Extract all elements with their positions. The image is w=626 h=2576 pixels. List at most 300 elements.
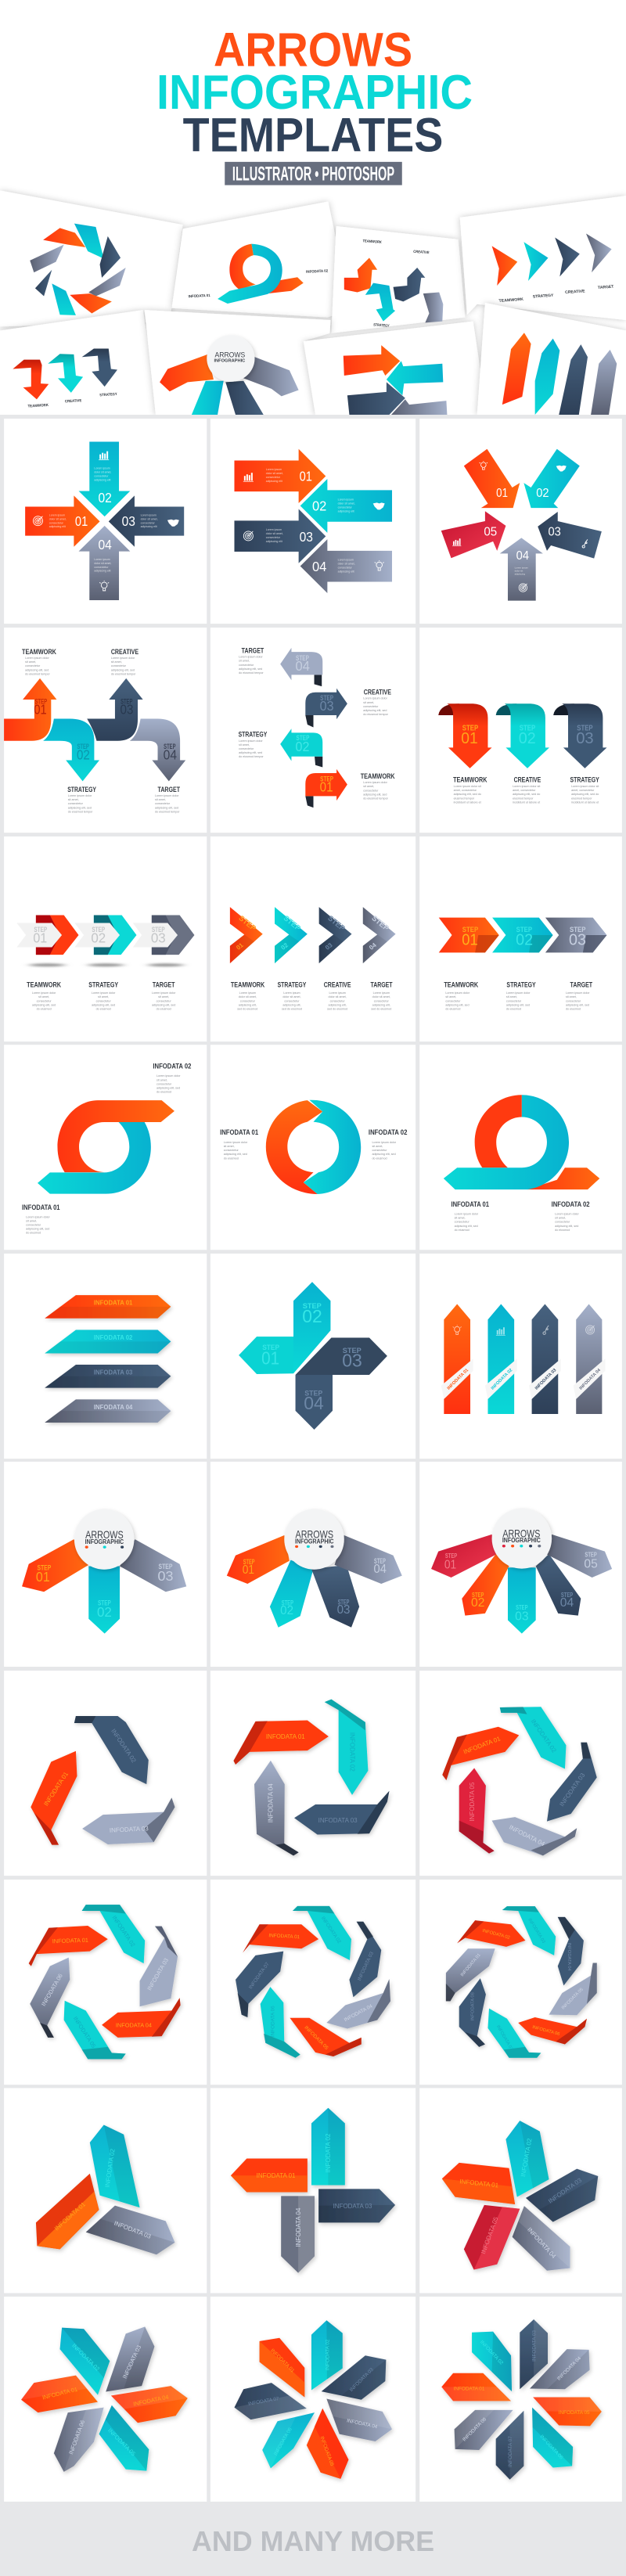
text: target: sit amet,	[239, 660, 250, 663]
ribbon 02	[457, 1920, 525, 1947]
ribbon 03	[502, 1906, 556, 1955]
mockup sheet: ribbon arrows: TEAMWORK	[27, 404, 49, 408]
arrow 04: adipiscing elit	[338, 570, 354, 573]
ribbon 02: 02	[296, 739, 309, 754]
ribbon 03	[305, 689, 347, 728]
text: teamwork: sit amet,	[445, 995, 456, 998]
arrow 04: INFODATA 04	[132, 2393, 169, 2408]
ribbon 06	[261, 1987, 300, 2058]
text: strategy: consectetur	[68, 802, 84, 805]
panel: five petals with circle	[419, 1462, 622, 1667]
text: strategy: Lorem ipsum dolor	[68, 794, 92, 797]
ribbon 01: INFODATA 01	[460, 1953, 482, 1977]
text: infodata 02	[552, 1201, 590, 1232]
petal 05: STEP	[585, 1552, 597, 1559]
mockup sheet: teal and orange ring: INFODATA 01	[188, 294, 210, 299]
arrow 04 down: 04	[164, 747, 177, 762]
chevron 01: 01	[235, 941, 245, 952]
text: infodata 01: adipiscing elit, sed	[455, 1225, 478, 1228]
panel: folded cross	[210, 1254, 416, 1459]
petal 01: 01	[36, 1569, 50, 1585]
arrow 01 up	[4, 678, 56, 741]
arrow 06: INFODATA 06	[273, 2427, 293, 2456]
bar 02	[45, 1330, 171, 1353]
mockup sheet: ring of ribbons	[0, 190, 183, 326]
text: strategy: consectetur	[284, 999, 300, 1002]
text: infodata 01	[22, 1204, 60, 1235]
arrow 04 up: 04	[99, 537, 112, 552]
icon: handshake	[373, 502, 385, 509]
text: strategy: adipiscing elit, sed	[92, 1003, 115, 1006]
text: creative: adipiscing elit, sed	[363, 709, 387, 712]
icon: light bulb	[480, 461, 487, 470]
arrow 02: 02	[302, 1307, 322, 1326]
icon: light bulb	[375, 560, 384, 570]
text: creative: sed do eiusmod	[327, 1007, 347, 1010]
arrow 02	[311, 2320, 343, 2390]
petal 04: STEP	[374, 1558, 386, 1565]
text: infodata 02: do eiusmod	[156, 1091, 171, 1094]
panel: vertical bars with labels	[419, 1254, 622, 1459]
ribbon 03: INFODATA 03	[527, 1918, 545, 1945]
text: creative: sit amet,	[111, 660, 122, 664]
ribbon 02: INFODATA 02	[110, 1914, 137, 1948]
text: strategy: STRATEGY	[239, 731, 268, 739]
circle badge: INFOGRAPHIC	[502, 1538, 541, 1545]
arrow 01: STEP	[262, 1343, 279, 1351]
text: teamwork: TEAMWORK	[361, 773, 395, 780]
petal 03: STEP	[159, 1563, 173, 1570]
bar 03: INFODATA 03	[534, 1368, 557, 1391]
text: target: TARGET	[158, 786, 180, 793]
text: infodata 02: do eiusmod	[372, 1157, 387, 1160]
bar 01	[45, 1295, 171, 1319]
text: teamwork	[22, 649, 56, 675]
text: infodata 02: sit amet,	[156, 1078, 167, 1081]
ribbon 05: INFODATA 05	[303, 2025, 329, 2051]
arrow 01	[239, 1337, 293, 1374]
arrow 02 down: consectetur	[94, 474, 109, 477]
arrow 03	[553, 703, 607, 768]
text: strategy: dolor sit amet,	[282, 995, 301, 998]
text: creative: Lorem ipsum dolor	[363, 697, 388, 700]
text: teamwork: Lorem ipsum dolor sit	[454, 785, 481, 788]
footer: and many more: AND MANY MORE	[192, 2525, 434, 2557]
panel: six faceted arrows	[4, 2297, 207, 2502]
text: target	[239, 647, 264, 675]
text: infodata 02: INFODATA 02	[369, 1129, 407, 1137]
arrow 07: INFODATA 07	[508, 2436, 513, 2467]
ribbon 01	[442, 1727, 519, 1780]
text: infodata 01: INFODATA 01	[220, 1129, 258, 1137]
arrow 04: dolor sit amet,	[338, 562, 355, 565]
arrow 06	[54, 2408, 104, 2472]
arrow 04 up	[79, 526, 130, 600]
arrow 04	[500, 538, 543, 601]
text: strategy: Lorem ipsum	[283, 991, 300, 995]
text: strategy: Lorem ipsum dolor sit	[571, 785, 599, 788]
text: target: consectetur	[155, 802, 171, 805]
text: teamwork	[27, 981, 62, 1010]
text: teamwork: do eiusmod	[445, 1007, 460, 1010]
petal 01: STEP	[37, 1565, 52, 1572]
arrow 01	[234, 449, 326, 503]
arrow 02	[505, 2121, 549, 2197]
text: strategy: sit amet,	[98, 995, 109, 998]
text: strategy: Lorem ipsum dolor	[506, 991, 531, 995]
text: creative: dolor sit amet,	[329, 995, 347, 998]
text: creative: do eiusmod tempor	[111, 672, 136, 675]
text: teamwork: Lorem ipsum dolor	[363, 781, 388, 784]
petal 05: 05	[584, 1557, 598, 1570]
circle badge	[284, 1509, 344, 1570]
text: teamwork: incididunt ut labore et	[454, 801, 481, 804]
circle badge: ARROWS	[296, 1528, 333, 1541]
arrow 03: 03	[576, 729, 594, 747]
ribbon 04	[102, 1998, 181, 2038]
text: target	[152, 981, 176, 1010]
text: infodata 02: Lorem ipsum dolor	[156, 1074, 181, 1078]
mockup sheet: chevrons: CREATIVE	[565, 289, 586, 295]
ribbon 02: INFODATA 02	[482, 1929, 510, 1941]
text: strategy: Lorem ipsum dolor	[92, 991, 116, 995]
ribbon 06: INFODATA 06	[271, 2006, 276, 2037]
arrow 04	[513, 2206, 570, 2271]
arrow 03: Lorem ipsum	[266, 528, 282, 531]
petal 02: 02	[280, 1603, 293, 1617]
text: target: do eiusmod	[156, 1007, 171, 1010]
arrow 03	[106, 2326, 154, 2392]
panel: four petals with circle	[210, 1462, 416, 1667]
petal 04	[536, 1554, 581, 1616]
arrow 04: 04	[516, 549, 529, 563]
petal 03	[311, 1565, 359, 1628]
text: creative: Lorem ipsum dolor	[111, 657, 135, 660]
text: target: adipiscing elit,	[372, 1003, 390, 1006]
arrow 05: INFODATA 05	[319, 2436, 335, 2467]
text: teamwork: adipiscing elit, sed	[32, 1003, 56, 1006]
arrow 02: 02	[312, 498, 326, 514]
panel: four ribbons ring	[210, 1671, 416, 1876]
text: target: Lorem ipsum	[373, 991, 390, 995]
ribbon 06: INFODATA 06	[531, 2025, 560, 2037]
arrow 05	[464, 2205, 520, 2270]
arrow 04: dolor sit	[515, 569, 523, 572]
ribbon 04: STEP	[296, 655, 309, 662]
arrow 03: STEP	[570, 925, 585, 934]
bar 01: INFODATA 01	[94, 1300, 133, 1307]
arrow 01: consectetur	[266, 476, 281, 479]
text: infodata 01	[452, 1201, 489, 1232]
text: strategy: do eiusmod tempor	[68, 810, 93, 813]
ribbon 01: STEP	[320, 775, 333, 783]
text: infodata 02: INFODATA 02	[552, 1201, 590, 1209]
chevron 02	[74, 916, 136, 955]
arrow 03 left: 03	[122, 513, 135, 529]
arrow 04	[111, 2386, 188, 2423]
chevron 03	[133, 916, 194, 955]
arrow 01	[36, 2174, 99, 2249]
text: teamwork: sed do eiusmod	[237, 1007, 257, 1010]
text: strategy: STRATEGY	[88, 981, 118, 989]
bar 04: INFODATA 04	[94, 1404, 133, 1411]
chevron 02: STEP	[92, 926, 105, 934]
arrow 02 down	[43, 718, 99, 781]
panel: cross arrows	[4, 419, 207, 624]
arrow 03: STEP	[577, 723, 593, 732]
ribbon 03: INFODATA 03	[110, 1825, 149, 1834]
arrow 01: INFODATA 01	[269, 2348, 296, 2374]
chevron 01	[230, 907, 263, 963]
arrow 06: INFODATA 06	[538, 2434, 564, 2461]
arrow 03 left: consectetur	[141, 521, 156, 524]
text: teamwork	[231, 981, 265, 1010]
circle badge	[74, 1509, 134, 1570]
text: strategy: sit amet,	[68, 798, 79, 801]
text: strategy	[506, 981, 536, 1010]
ribbon 01: 01	[320, 779, 333, 794]
ribbon 01: INFODATA 01	[268, 1933, 300, 1940]
ribbon 03: 03	[320, 698, 334, 714]
text: teamwork: Lorem ipsum	[239, 991, 256, 995]
arrow 02 down: 02	[77, 747, 90, 762]
panel: three petals with circle	[4, 1462, 207, 1667]
panel: seven ribbons ring	[210, 1880, 416, 2085]
mockup sheet: chevrons: TARGET	[598, 285, 614, 290]
chevron 01: STEP	[237, 914, 257, 934]
arrow 01: STEP	[462, 723, 478, 732]
arrow 01	[442, 2163, 515, 2204]
ribbon 05	[64, 2001, 126, 2059]
arrow 03 up: STEP	[121, 698, 133, 706]
arrow 03	[526, 2169, 598, 2222]
arrow 03 left: Lorem ipsum	[141, 513, 156, 516]
text: target	[370, 981, 393, 1010]
text: teamwork: TEAMWORK	[22, 649, 56, 657]
arrow 04: adipiscing	[515, 572, 525, 575]
arrow 03: 03	[549, 525, 561, 538]
arrow 04 up: Lorem ipsum	[94, 558, 110, 561]
text: infodata 02: consectetur	[555, 1221, 570, 1224]
bar 01	[441, 1304, 473, 1414]
icon: bar chart	[243, 473, 254, 482]
ribbon 03	[294, 1791, 389, 1835]
panel: looped ring	[419, 1045, 622, 1250]
text: teamwork: adipiscing elit, sed do	[454, 793, 481, 796]
text: creative	[324, 981, 351, 1010]
arrow 03	[86, 2206, 174, 2254]
arrow 01 right	[25, 495, 100, 547]
icon: light bulb	[453, 1325, 462, 1334]
text: target: adipiscing elit, sed	[155, 806, 178, 809]
panel: three faceted arrows	[4, 2088, 207, 2293]
bar 04: INFODATA 04	[579, 1368, 603, 1391]
text: teamwork: sit amet,	[25, 660, 36, 664]
ribbon 02	[500, 1707, 566, 1769]
text: infodata 01: INFODATA 01	[22, 1204, 60, 1211]
petal 03	[508, 1567, 536, 1634]
panel: woven wave arrows	[4, 628, 207, 833]
ribbon 05	[549, 1963, 597, 2015]
text: teamwork: TEAMWORK	[444, 981, 479, 989]
arrow: teal half	[304, 1100, 361, 1194]
ribbon 04	[280, 648, 322, 686]
chevron 02	[275, 907, 308, 963]
text: teamwork: adipiscing elit, sed	[363, 793, 387, 796]
mockup sheet: wave arrows: CREATIVE	[413, 250, 430, 255]
text: infodata 01: INFODATA 01	[452, 1201, 489, 1209]
icon: target	[586, 1326, 595, 1334]
arrow 05: INFODATA 05	[106, 2427, 137, 2457]
text: teamwork: sit amet,	[38, 995, 49, 998]
text: infodata 02: adipiscing elit, sed	[156, 1086, 180, 1089]
ribbon 03: INFODATA 03	[357, 1951, 375, 1981]
panel: eight faceted arrows	[419, 2297, 622, 2502]
text: infodata 01: sit amet,	[455, 1217, 466, 1220]
bar 01: INFODATA 01	[447, 1368, 470, 1391]
text: target: Lorem ipsum dolor	[152, 991, 176, 995]
text: teamwork: consectetur	[363, 789, 379, 792]
ribbon 03: STEP	[320, 695, 333, 702]
arrow 01	[231, 2158, 308, 2192]
mockup sheet: petals with circle: INFOGRAPHIC	[214, 358, 246, 363]
text: infodata 01: adipiscing elit, sed	[26, 1228, 49, 1231]
text: infodata 02: consectetur	[372, 1149, 387, 1152]
ribbon 05: INFODATA 05	[561, 1988, 585, 2011]
bar 02: INFODATA 02	[94, 1335, 133, 1341]
text: target: do eiusmod tempor	[155, 810, 180, 813]
text: infodata 01: Lorem ipsum dolor	[224, 1141, 248, 1144]
arrow 02 down: dolor sit amet,	[94, 470, 111, 473]
arrow 03: STEP	[343, 1346, 362, 1355]
text: teamwork: TEAMWORK	[231, 981, 265, 989]
bar 04	[45, 1399, 171, 1423]
arrow: teal half	[38, 1122, 151, 1194]
arrow 01: 01	[300, 469, 312, 484]
title: TEMPLATES: TEMPLATES	[183, 108, 443, 162]
ribbon 07	[487, 2009, 541, 2058]
text: strategy: incididunt ut labore et	[571, 801, 599, 804]
text: infodata 02: consectetur	[156, 1082, 172, 1085]
arrow 01 right: adipiscing elit	[49, 525, 66, 528]
text: teamwork: adipiscing elit,	[239, 1003, 257, 1006]
panel: five faceted arrows	[419, 2088, 622, 2293]
panel: five ribbons ring	[419, 1671, 622, 1876]
arrow 01	[464, 449, 520, 508]
mockup sheet: arrow rows	[304, 322, 487, 415]
text: target: sit amet,	[158, 995, 169, 998]
arrow 01: INFODATA 01	[257, 2172, 296, 2179]
text: infodata 02: Lorem ipsum dolor	[555, 1212, 579, 1215]
panel: four faceted arrows	[210, 2088, 416, 2293]
text: teamwork: amet, consectetur	[454, 789, 477, 792]
arrow 02: STEP	[516, 925, 532, 934]
petal 02: STEP	[98, 1599, 111, 1607]
arrow 04: INFODATA 04	[526, 2226, 558, 2260]
ribbon 05: INFODATA 05	[469, 1782, 476, 1822]
arrow 01 right: Lorem ipsum	[49, 513, 65, 516]
bar 04	[574, 1304, 605, 1414]
chevron 01	[16, 916, 79, 955]
arrow 01 right: consectetur	[49, 521, 64, 524]
arrow 03 left: adipiscing elit	[141, 525, 157, 528]
arrow 02	[293, 1282, 330, 1373]
arrow 03: dolor sit amet,	[266, 532, 283, 535]
petal 03	[120, 1539, 186, 1592]
arrow 02: INFODATA 02	[326, 2339, 331, 2370]
icon: handshake	[167, 520, 179, 527]
arrow 03	[234, 509, 326, 563]
text: teamwork: Lorem ipsum dolor	[25, 657, 49, 660]
panel: arrow chain	[419, 836, 622, 1042]
arrow 02: Lorem ipsum	[338, 498, 354, 502]
arrow 01: INFODATA 01	[454, 2386, 485, 2391]
arrow 02	[60, 2328, 110, 2395]
panel: curled down arrows	[419, 628, 622, 833]
ribbon 04: INFODATA 04	[268, 1783, 275, 1822]
text: strategy	[67, 786, 96, 813]
text: infodata 02	[153, 1063, 191, 1094]
arrow 01	[260, 2338, 304, 2397]
text: strategy: sit amet,	[239, 743, 250, 747]
arrow 04 down	[130, 718, 185, 781]
text: creative: Lorem ipsum	[329, 991, 346, 995]
petal 03: 03	[158, 1568, 173, 1584]
text: creative: adipiscing elit, sed	[111, 668, 135, 671]
arrow 03 up	[87, 678, 143, 741]
text: creative: CREATIVE	[514, 776, 541, 784]
arrow 02 down: STEP	[77, 743, 89, 750]
text: infodata 01: Lorem ipsum dolor	[455, 1212, 479, 1215]
mockup sheet: wave arrows: TEAMWORK	[362, 239, 383, 245]
petal 01: STEP	[445, 1553, 457, 1560]
arrow 03: INFODATA 03	[113, 2220, 153, 2240]
icon: target	[243, 531, 253, 541]
ribbon 05: INFODATA 05	[72, 2015, 97, 2049]
panel: hero header	[0, 23, 626, 415]
text: teamwork: TEAMWORK	[27, 981, 62, 989]
text: infodata 02: sit amet,	[372, 1145, 383, 1148]
shadow ellipses	[29, 963, 184, 966]
arrow 02: INFODATA 02	[325, 2133, 332, 2172]
text: target: consectetur	[239, 664, 254, 667]
text: target: adipiscing elit, sed	[152, 1003, 175, 1006]
arrow 02: INFODATA 02	[70, 2342, 101, 2373]
arrow 02 down	[79, 441, 130, 516]
ribbon 04: INFODATA 04	[344, 2003, 374, 2023]
text: teamwork: Lorem ipsum dolor	[445, 991, 470, 995]
text: target: sit amet,	[566, 995, 577, 998]
petal 01	[431, 1534, 497, 1578]
text: target	[566, 981, 592, 1010]
arrow 04: 04	[312, 559, 326, 574]
arrow 02	[472, 2332, 512, 2391]
text: strategy: STRATEGY	[278, 981, 307, 989]
arrow 03 left: dolor sit amet,	[141, 517, 158, 520]
arrow 01	[438, 703, 492, 768]
text: creative: sit amet,	[363, 701, 374, 704]
ribbon 03: INFODATA 03	[558, 1772, 587, 1808]
arrow 03: INFODATA 03	[333, 2203, 372, 2210]
arrow 03: consectetur	[266, 536, 281, 539]
arrow 07	[496, 2411, 523, 2480]
mockup sheet: chevrons	[460, 196, 626, 320]
arrow 05: 05	[484, 525, 497, 538]
chevron 01: 01	[33, 930, 47, 946]
petal 02: 02	[97, 1604, 112, 1620]
arrow 01 up: STEP	[34, 698, 47, 706]
arrow 01: dolor sit amet,	[266, 472, 283, 475]
